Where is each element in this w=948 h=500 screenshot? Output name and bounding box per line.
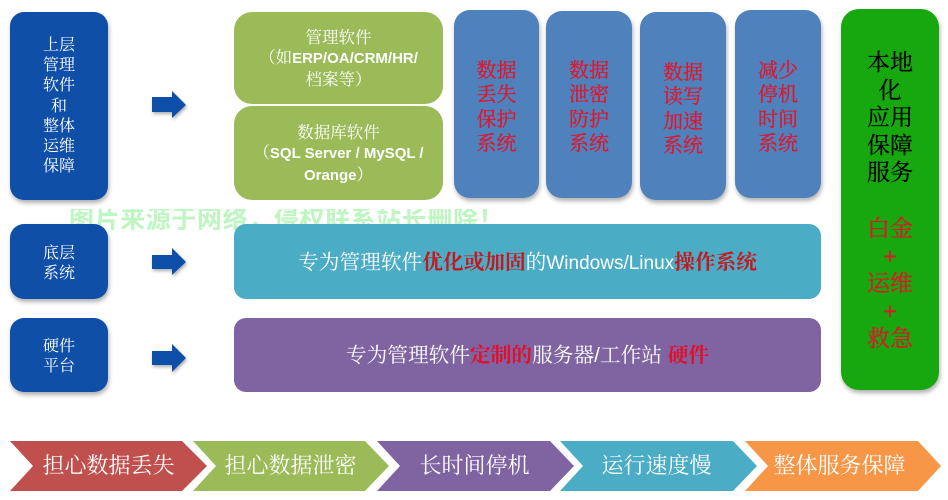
panel: local service: 救急: [867, 325, 913, 351]
panel: upper software label: 和: [51, 98, 67, 115]
chevron: red: [10, 441, 207, 491]
chevron: teal: [560, 441, 757, 491]
panel: data leak prevention: 防护: [569, 109, 609, 131]
panel: data leak prevention: 数据: [569, 60, 609, 82]
panel: local service: 运维: [867, 270, 913, 296]
panel: reduce downtime: 停机: [758, 84, 798, 106]
panel: database software: [234, 106, 443, 200]
panel: server hardware: 专为管理软件定制的服务器/工作站 硬件: [346, 344, 709, 367]
arrow: system layer: [152, 248, 186, 275]
panel: database software: 数据库软件: [297, 124, 380, 142]
panel: upper software label: 上层: [43, 37, 75, 54]
chevron label: downtime: 长时间停机: [419, 453, 530, 478]
panel: data loss protection: 丢失: [476, 84, 516, 106]
chevron label: data loss: 担心数据丢失: [42, 453, 174, 478]
panel: database software: （SQL Server / MySQL /: [253, 144, 424, 162]
panel: hardware label: 硬件: [43, 338, 75, 355]
panel: hardware label: 平台: [43, 358, 75, 374]
panel: read write acceleration: 系统: [663, 135, 703, 157]
panel: local service: 白金: [867, 215, 913, 241]
panel: data leak prevention: [546, 11, 632, 198]
panel: read write acceleration: 数据: [663, 62, 703, 84]
panel: reduce downtime: 时间: [758, 109, 798, 131]
panel: upper software label: 运维: [43, 138, 75, 155]
panel: server hardware: [234, 318, 821, 392]
panel: database software: Orange）: [304, 166, 373, 184]
panel: data loss protection: 系统: [476, 133, 516, 155]
chevron label: slow: 运行速度慢: [601, 453, 712, 478]
panel: reduce downtime: [735, 10, 821, 198]
panel: management software: [234, 12, 443, 104]
panel: data loss protection: 保护: [476, 109, 516, 131]
panel: upper software label: 整体: [43, 118, 75, 135]
panel: local service: 化: [878, 77, 902, 103]
chevron: green: [193, 441, 389, 491]
panel: local service: +: [883, 298, 897, 324]
panel: reduce downtime: 减少: [758, 60, 798, 82]
panel: local service: 服务: [867, 159, 913, 185]
panel: local service: 应用: [867, 104, 913, 130]
panel: upper software label: 保障: [43, 158, 75, 175]
panel: system label: 底层: [43, 245, 75, 262]
panel: operating system: 专为管理软件优化或加固的Windows/Linux操作系统: [298, 251, 757, 274]
panel: local service: [841, 9, 939, 390]
panel: data leak prevention: 系统: [569, 133, 609, 155]
panel: read write acceleration: [640, 12, 726, 200]
panel: system label: [10, 224, 108, 299]
chevron: purple: [377, 441, 574, 491]
panel: read write acceleration: 读写: [663, 86, 703, 108]
panel: system label: 系统: [43, 264, 75, 282]
panel: upper software label: 软件: [43, 77, 75, 94]
arrow: hardware layer: [152, 344, 186, 372]
panel: data leak prevention: 泄密: [569, 84, 609, 106]
chevron label: overall service: 整体服务保障: [773, 453, 906, 478]
panel: hardware label: [10, 318, 108, 392]
panel: local service: 保障: [867, 132, 913, 158]
panel: local service: 本地: [867, 49, 913, 75]
panel: management software: 管理软件: [306, 29, 372, 47]
chevron: orange: [745, 441, 941, 491]
panel: data loss protection: [454, 10, 539, 198]
chevron label: data leak: 担心数据泄密: [224, 453, 356, 478]
panel: data loss protection: 数据: [476, 60, 516, 82]
panel: operating system: [234, 224, 821, 299]
panel: local service: +: [883, 243, 897, 269]
panel: reduce downtime: 系统: [758, 133, 798, 155]
panel: read write acceleration: 加速: [663, 111, 703, 133]
panel: upper software label: [10, 12, 108, 200]
panel: management software: 档案等）: [306, 71, 372, 89]
panel: upper software label: 管理: [43, 57, 75, 74]
panel: management software: （如ERP/OA/CRM/HR/: [259, 49, 418, 67]
arrow: upper layer: [152, 91, 186, 118]
